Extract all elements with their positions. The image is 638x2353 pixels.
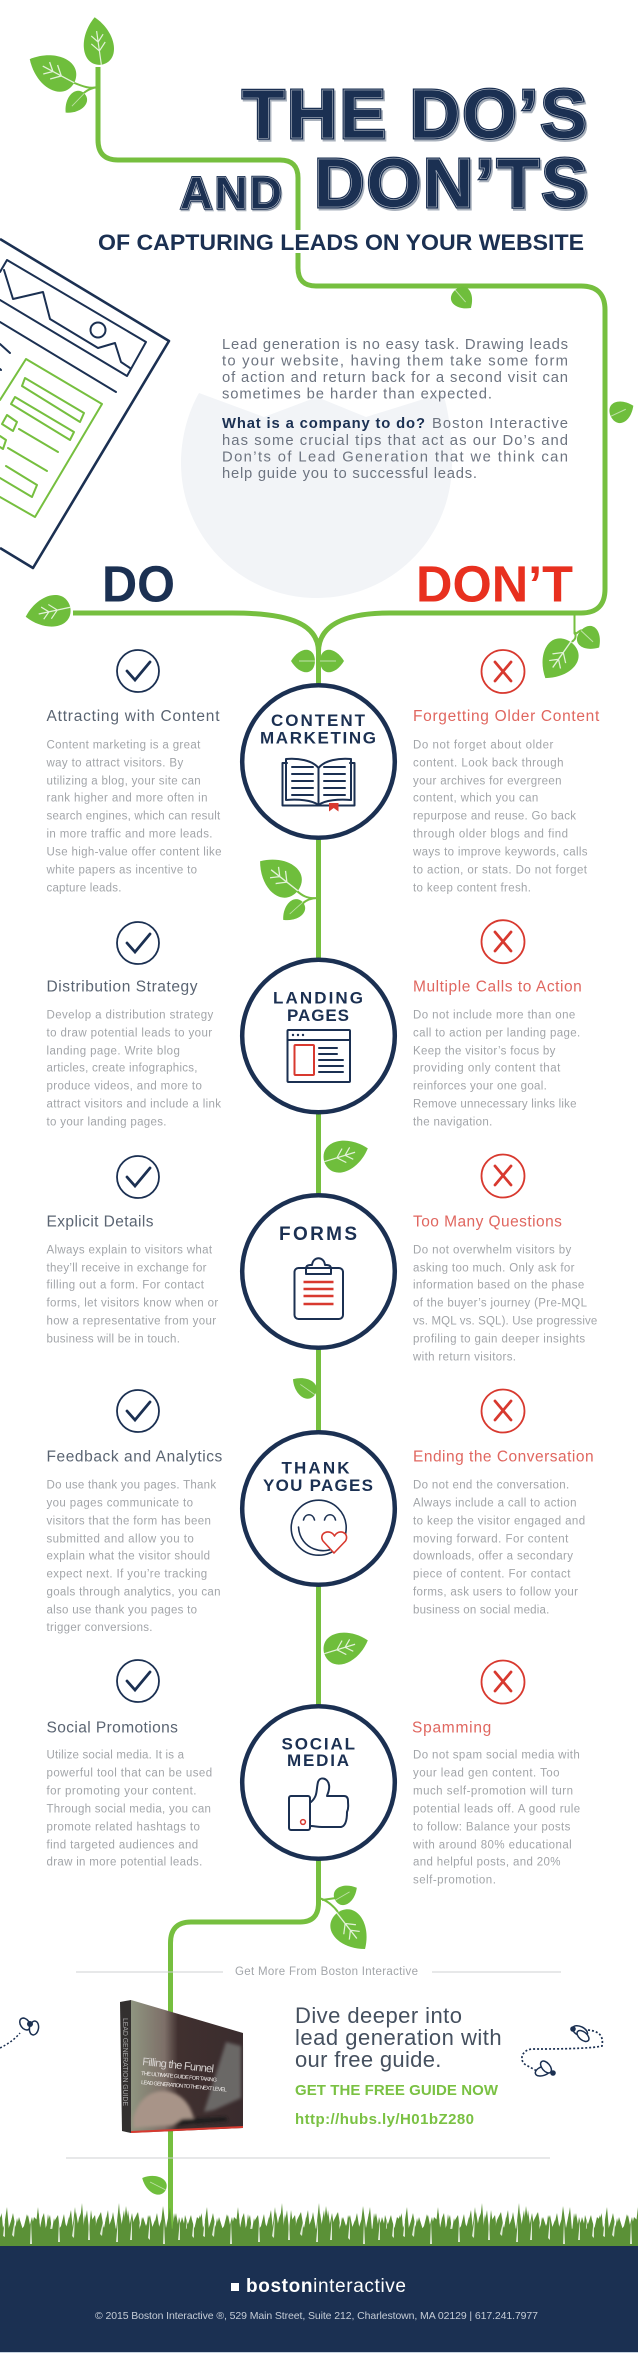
icon: check (117, 922, 159, 964)
column heading: DON'T: DON’T (416, 556, 573, 613)
do: distribution strategy (46, 922, 221, 1128)
title line: The Do's: THE DO’S (244, 77, 588, 155)
circle: forms: FORMS (279, 1224, 357, 1245)
do: feedback and analytics: visitors that the form has been (46, 1515, 211, 1527)
do: explicit details: how a representative from your (46, 1315, 216, 1327)
intro text: has some crucial tips that act as our Do’s and (222, 433, 568, 449)
icon: check (117, 1660, 159, 1702)
intro text: of action and return back for a second visit can (222, 370, 568, 386)
section: thank you pages (46, 1390, 594, 1634)
circle: landing pages: LANDING (273, 988, 363, 1007)
icon: cross (482, 1660, 524, 1704)
dont: forgetting older content: repurpose and reuse. Go back (413, 810, 576, 822)
dont: multiple calls to action: Remove unnecessary links like (413, 1098, 576, 1110)
circle: content marketing: MARKETING (260, 728, 376, 747)
do: distribution strategy: to your landing pages. (46, 1116, 166, 1128)
dont: multiple calls to action (413, 920, 582, 1128)
title line: The Do's: THE DO’S (242, 75, 587, 153)
icon: cross (482, 920, 524, 963)
circle: thank you pages: THANK (282, 1458, 350, 1477)
divider with heading: Get More From Boston Interactive (235, 1966, 418, 1978)
section: forms (46, 1154, 597, 1363)
hanging leaves on the right (531, 614, 607, 688)
icon: cross (482, 650, 524, 693)
dont: multiple calls to action: Keep the visitor’s focus by (413, 1045, 556, 1057)
growing vine stem (73, 67, 605, 2240)
title line: Don'ts: DON’TS (314, 144, 588, 222)
dont: too many questions (412, 1154, 597, 1363)
guide call to action (295, 2003, 502, 2128)
do: social promotions: find targeted audiences and (46, 1839, 198, 1851)
do: explicit details (46, 1156, 218, 1345)
junction leaves (291, 650, 344, 672)
guide call to action: our free guide. (295, 2047, 441, 2072)
dont: forgetting older content: content. Look back through (413, 757, 564, 769)
leaf right of stem, above forms (320, 1133, 372, 1177)
do: social promotions: Through social media, you can (46, 1803, 211, 1815)
title line: Don'ts: DON’TS (316, 146, 590, 224)
dont: forgetting older content: your archives for evergreen (413, 775, 562, 787)
circle: forms (242, 1195, 395, 1348)
intro text: Boston Interactive (432, 416, 568, 432)
title line: And: AND (180, 168, 282, 218)
do: attracting with content (46, 650, 222, 894)
leaf right of stem, above social (320, 1625, 372, 1669)
dont: forgetting older content: to action, or stats. Do not forget (413, 864, 588, 876)
dont: ending the conversation: Always include a call to action (413, 1497, 576, 1509)
book spine: LEAD GENERATION GUIDE (121, 2018, 128, 2106)
guide call to action: GET THE FREE GUIDE NOW (295, 2082, 499, 2099)
leaf at left end of branch (22, 592, 74, 632)
icon: thumbs up (289, 1778, 348, 1830)
leaf under vine (447, 283, 479, 315)
dont: forgetting older content: Forgetting Older Content (413, 708, 600, 725)
dont: too many questions: asking too much. Only ask for (413, 1262, 575, 1274)
footer: © 2015 Boston Interactive ®, 529 Main Street, Suite 212, Charlestown, MA 02129 | 617.241.7977 (95, 2310, 538, 2322)
dont: ending the conversation: Ending the Conversation (413, 1448, 594, 1466)
grass (0, 2190, 638, 2246)
dont: forgetting older content: Do not forget about older (413, 739, 554, 751)
book cover: LEAD GENERATION TO THE NEXT LEVEL (141, 2080, 227, 2093)
circle: landing pages: PAGES (287, 1006, 349, 1025)
do: social promotions: Social Promotions (46, 1720, 178, 1736)
do: attracting with content: way to attract visitors. By (46, 757, 183, 769)
title line: And: AND (181, 169, 283, 220)
leaves below content marketing (249, 848, 318, 927)
intro text: What is a company to do? (222, 416, 425, 432)
icon: clipboard (294, 1258, 343, 1319)
circle: thank you pages: YOU PAGES (263, 1476, 373, 1495)
icon: open book (282, 759, 354, 812)
footer (0, 2246, 638, 2353)
do: explicit details: filling out a form. For contact (46, 1279, 205, 1291)
do: explicit details: forms, let visitors know when or (46, 1297, 218, 1309)
intro text: Lead generation is no easy task. Drawing leads (222, 337, 568, 353)
dont: spamming: to follow: Balance your posts (413, 1821, 571, 1833)
dont: spamming: and helpful posts, and 20% (413, 1857, 560, 1869)
background tulip shape (181, 393, 452, 598)
do: explicit details: Always explain to visitors what (46, 1244, 213, 1256)
dont: too many questions: Do not overwhelm visitors by (413, 1244, 572, 1256)
do: distribution strategy: attract visitors and include a link (46, 1098, 221, 1110)
dont: ending the conversation (413, 1390, 594, 1616)
circle: landing pages (242, 960, 395, 1112)
section: landing pages (46, 920, 582, 1128)
icon: cross (482, 1154, 524, 1198)
small leaf left of stem (288, 1372, 320, 1402)
dont: forgetting older content: to keep content fresh. (413, 882, 531, 894)
do: feedback and analytics: goals through analytics, you can (46, 1586, 220, 1598)
do: feedback and analytics: Do use thank you pages. Thank (46, 1479, 216, 1491)
icon: right bees with trail (522, 2024, 602, 2078)
dont: too many questions: profiling to gain deeper insights (413, 1333, 585, 1345)
leaf on lower stem (138, 2170, 170, 2198)
intro text: help guide you to successful leads. (222, 466, 477, 482)
dont: spamming: with around 80% educational (412, 1839, 572, 1851)
intro text: to your website, having them take some form (222, 354, 568, 370)
dont: spamming: Do not spam social media with (413, 1749, 580, 1761)
do: attracting with content: Content marketing is a great (46, 739, 201, 751)
top leaves cluster (22, 15, 116, 119)
guide call to action: lead generation with (295, 2025, 502, 2050)
do: distribution strategy: produce videos, and more to (46, 1080, 202, 1092)
dont: ending the conversation: Do not end the conversation. (413, 1479, 569, 1491)
dont: ending the conversation: to keep the visitor engaged and (413, 1515, 585, 1527)
title line: The Do's: THE DO’S (242, 75, 587, 153)
icon: check (117, 1390, 159, 1432)
title line: Don'ts: DON’TS (314, 144, 588, 222)
intro text: Don’ts of Lead Generation that we think can (222, 450, 568, 466)
illustration: web page document (0, 239, 169, 568)
intro text: sometimes be harder than expected. (222, 386, 492, 402)
dont: multiple calls to action: reinforces your one goal. (413, 1080, 547, 1092)
icon: cross (482, 1390, 524, 1432)
do: social promotions: draw in more potential leads. (46, 1857, 202, 1869)
do: feedback and analytics: trigger conversions. (46, 1622, 152, 1634)
dont: multiple calls to action: Do not include more than one (413, 1009, 575, 1021)
dont: ending the conversation: business on social media. (413, 1604, 549, 1616)
lower divider (66, 2157, 550, 2159)
circle: social media: SOCIAL (282, 1734, 355, 1753)
dont: too many questions: Too Many Questions (413, 1214, 562, 1230)
dont: multiple calls to action: the navigation. (413, 1116, 492, 1128)
title (180, 75, 590, 224)
dont: ending the conversation: forms, ask users to follow your (413, 1586, 578, 1598)
do: feedback and analytics: explain what the visitor should (46, 1550, 210, 1562)
circle: content marketing: CONTENT (271, 711, 366, 730)
logo: bostoninteractive (246, 2276, 406, 2297)
do: explicit details: Explicit Details (46, 1214, 154, 1230)
icon: left bee (0, 2016, 40, 2048)
dont: spamming: self-promotion. (413, 1874, 496, 1886)
do: social promotions: for promoting your content. (46, 1785, 196, 1797)
do: feedback and analytics: submitted and allow you to (46, 1533, 194, 1545)
section: social media (46, 1660, 580, 1886)
do: distribution strategy: to draw potential leads to your (46, 1027, 212, 1039)
do: distribution strategy: landing page. Write blog (46, 1045, 180, 1057)
do: attracting with content: utilizing a blog, your site can (46, 775, 201, 787)
intro text (222, 337, 568, 482)
column heading: DO: DO (102, 556, 175, 613)
dont: ending the conversation: moving forward. For content (413, 1533, 569, 1545)
book cover: THE ULTIMATE GUIDE FOR TAKING (141, 2071, 217, 2084)
do: social promotions: powerful tool that can be used (46, 1767, 212, 1779)
icon: check (117, 650, 159, 692)
do: distribution strategy: Distribution Strategy (46, 978, 198, 996)
do: social promotions: promote related hashtags to (46, 1821, 200, 1833)
do: feedback and analytics: you pages communicate to (46, 1497, 193, 1509)
do: attracting with content: search engines, which can result (46, 810, 221, 822)
title line: And: AND (180, 168, 282, 218)
do: attracting with content: Attracting with Content (46, 708, 220, 725)
subtitle: OF CAPTURING LEADS ON YOUR WEBSITE (98, 230, 584, 255)
dont: spamming: Spamming (412, 1720, 491, 1736)
dont: multiple calls to action: Multiple Calls to Action (413, 978, 582, 996)
leaf on right vine (606, 396, 638, 426)
green form (0, 359, 102, 517)
do: feedback and analytics: expect next. If you’re tracking (46, 1568, 207, 1580)
dont: forgetting older content: content, which you can (413, 792, 538, 804)
book cover (131, 2000, 243, 2133)
do: attracting with content: white papers as incentive to (46, 864, 197, 876)
do: attracting with content: rank higher and more often in (46, 792, 208, 804)
dont: ending the conversation: piece of content. For contact (413, 1568, 571, 1580)
dont: multiple calls to action: providing only content that (413, 1062, 561, 1074)
circle: social media (242, 1706, 395, 1859)
guide call to action: http://hubs.ly/H01bZ280 (295, 2111, 474, 2128)
do: social promotions: Utilize social media. It is a (46, 1749, 185, 1761)
dont: spamming: potential leads off. A good rule (413, 1803, 580, 1815)
dont: too many questions: with return visitors. (412, 1351, 516, 1363)
dont: ending the conversation: downloads, offer a secondary (413, 1550, 573, 1562)
dont: forgetting older content (412, 650, 600, 894)
book cover: Filling the Funnel (142, 2056, 215, 2076)
do: feedback and analytics (46, 1390, 223, 1634)
dont: too many questions: of the buyer’s journey (Pre-MQL (413, 1297, 588, 1309)
circle: social media: MEDIA (287, 1751, 349, 1770)
guide call to action: Dive deeper into (295, 2003, 462, 2028)
dont: forgetting older content: ways to improve keywords, calls (412, 846, 588, 858)
do: explicit details: they’ll receive in exchange for (46, 1262, 207, 1274)
do: feedback and analytics: Feedback and Analytics (46, 1448, 223, 1466)
do: attracting with content: in more traffic and more leads. (46, 828, 212, 840)
dont: forgetting older content: through older blogs and find (413, 828, 568, 840)
do: distribution strategy: Develop a distribution strategy (46, 1009, 214, 1021)
icon: web page (288, 1030, 350, 1082)
dont: too many questions: information based on the phase (413, 1279, 584, 1291)
circle: content marketing (242, 685, 395, 838)
do: attracting with content: Use high-value offer content like (46, 846, 222, 858)
dont: spamming (412, 1660, 580, 1886)
dont: multiple calls to action: call to action per landing page. (413, 1027, 580, 1039)
dont: spamming: your lead gen content. Too (413, 1767, 560, 1779)
dont: spamming: much self-promotion will turn (413, 1785, 573, 1797)
do: social promotions (46, 1660, 212, 1869)
icon: smiley with heart (291, 1500, 347, 1555)
do: explicit details: business will be in touch. (46, 1333, 180, 1345)
do: feedback and analytics: also use thank you pages to (46, 1604, 197, 1616)
dont: too many questions: vs. MQL vs. SQL). Use progressive (413, 1315, 597, 1327)
guide book (120, 2000, 243, 2133)
circle: thank you pages (242, 1432, 395, 1585)
do: attracting with content: capture leads. (46, 882, 121, 894)
icon: check (117, 1156, 159, 1198)
do: distribution strategy: articles, create infographics, (46, 1062, 198, 1074)
section: content marketing (46, 650, 600, 894)
leaves below social media (319, 1880, 378, 1959)
